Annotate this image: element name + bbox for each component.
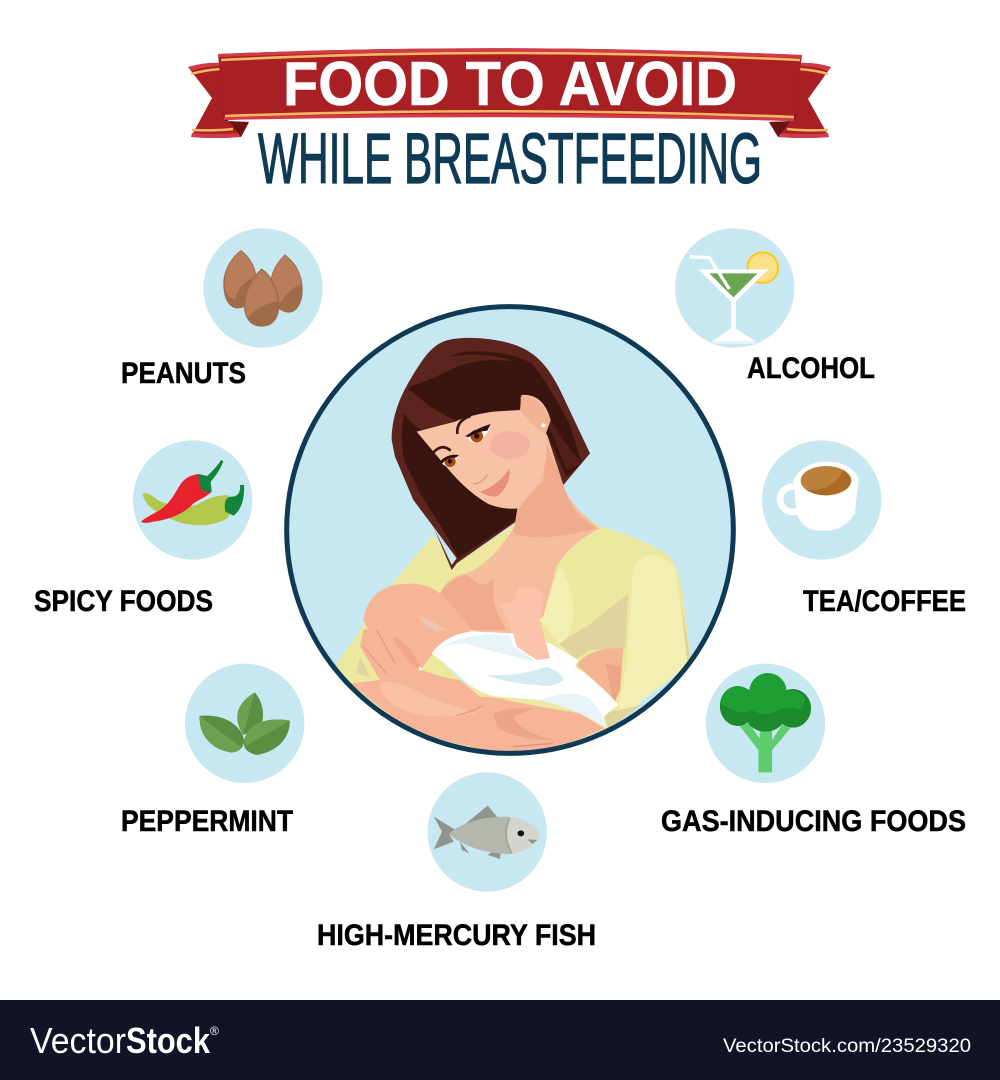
baby head <box>363 584 472 670</box>
title ribbon: food to avoid <box>188 48 831 138</box>
label: spicy foods: SPICY FOODS <box>34 585 213 618</box>
icon: peanuts <box>203 228 323 348</box>
chest and neck <box>440 433 600 637</box>
face <box>417 395 551 509</box>
icon: cocktail glass <box>675 228 794 348</box>
eyes, brows, nose and mouth <box>433 416 510 497</box>
icon: fish <box>428 772 547 892</box>
icon: peppermint leaves <box>185 664 304 783</box>
label: peppermint: PEPPERMINT <box>121 805 293 838</box>
hair <box>392 338 590 570</box>
label: peanuts: PEANUTS <box>121 357 246 390</box>
baby arm <box>500 587 550 660</box>
label: alcohol: ALCOHOL <box>747 352 875 385</box>
central illustration: mother breastfeeding <box>287 307 733 767</box>
icon: broccoli <box>706 664 825 783</box>
mother far arm <box>577 648 623 705</box>
watermark logo: ® <box>210 1024 219 1038</box>
footer bar <box>0 1000 1000 1080</box>
icon: coffee cup <box>762 440 881 560</box>
watermark logo: VectorStock <box>30 1020 224 1061</box>
mother near arm and hand <box>350 629 605 757</box>
watermark url: VectorStock.com/23529320 <box>723 1036 971 1057</box>
heading: food to avoid: FOOD TO AVOID <box>283 50 737 119</box>
blanket <box>432 632 618 728</box>
label: tea/coffee: TEA/COFFEE <box>803 585 966 618</box>
label: gas-inducing foods: GAS-INDUCING FOODS <box>661 805 966 838</box>
label: high-mercury fish: HIGH-MERCURY FISH <box>317 919 596 952</box>
icon: chili peppers <box>133 440 252 560</box>
sweater <box>335 513 691 767</box>
